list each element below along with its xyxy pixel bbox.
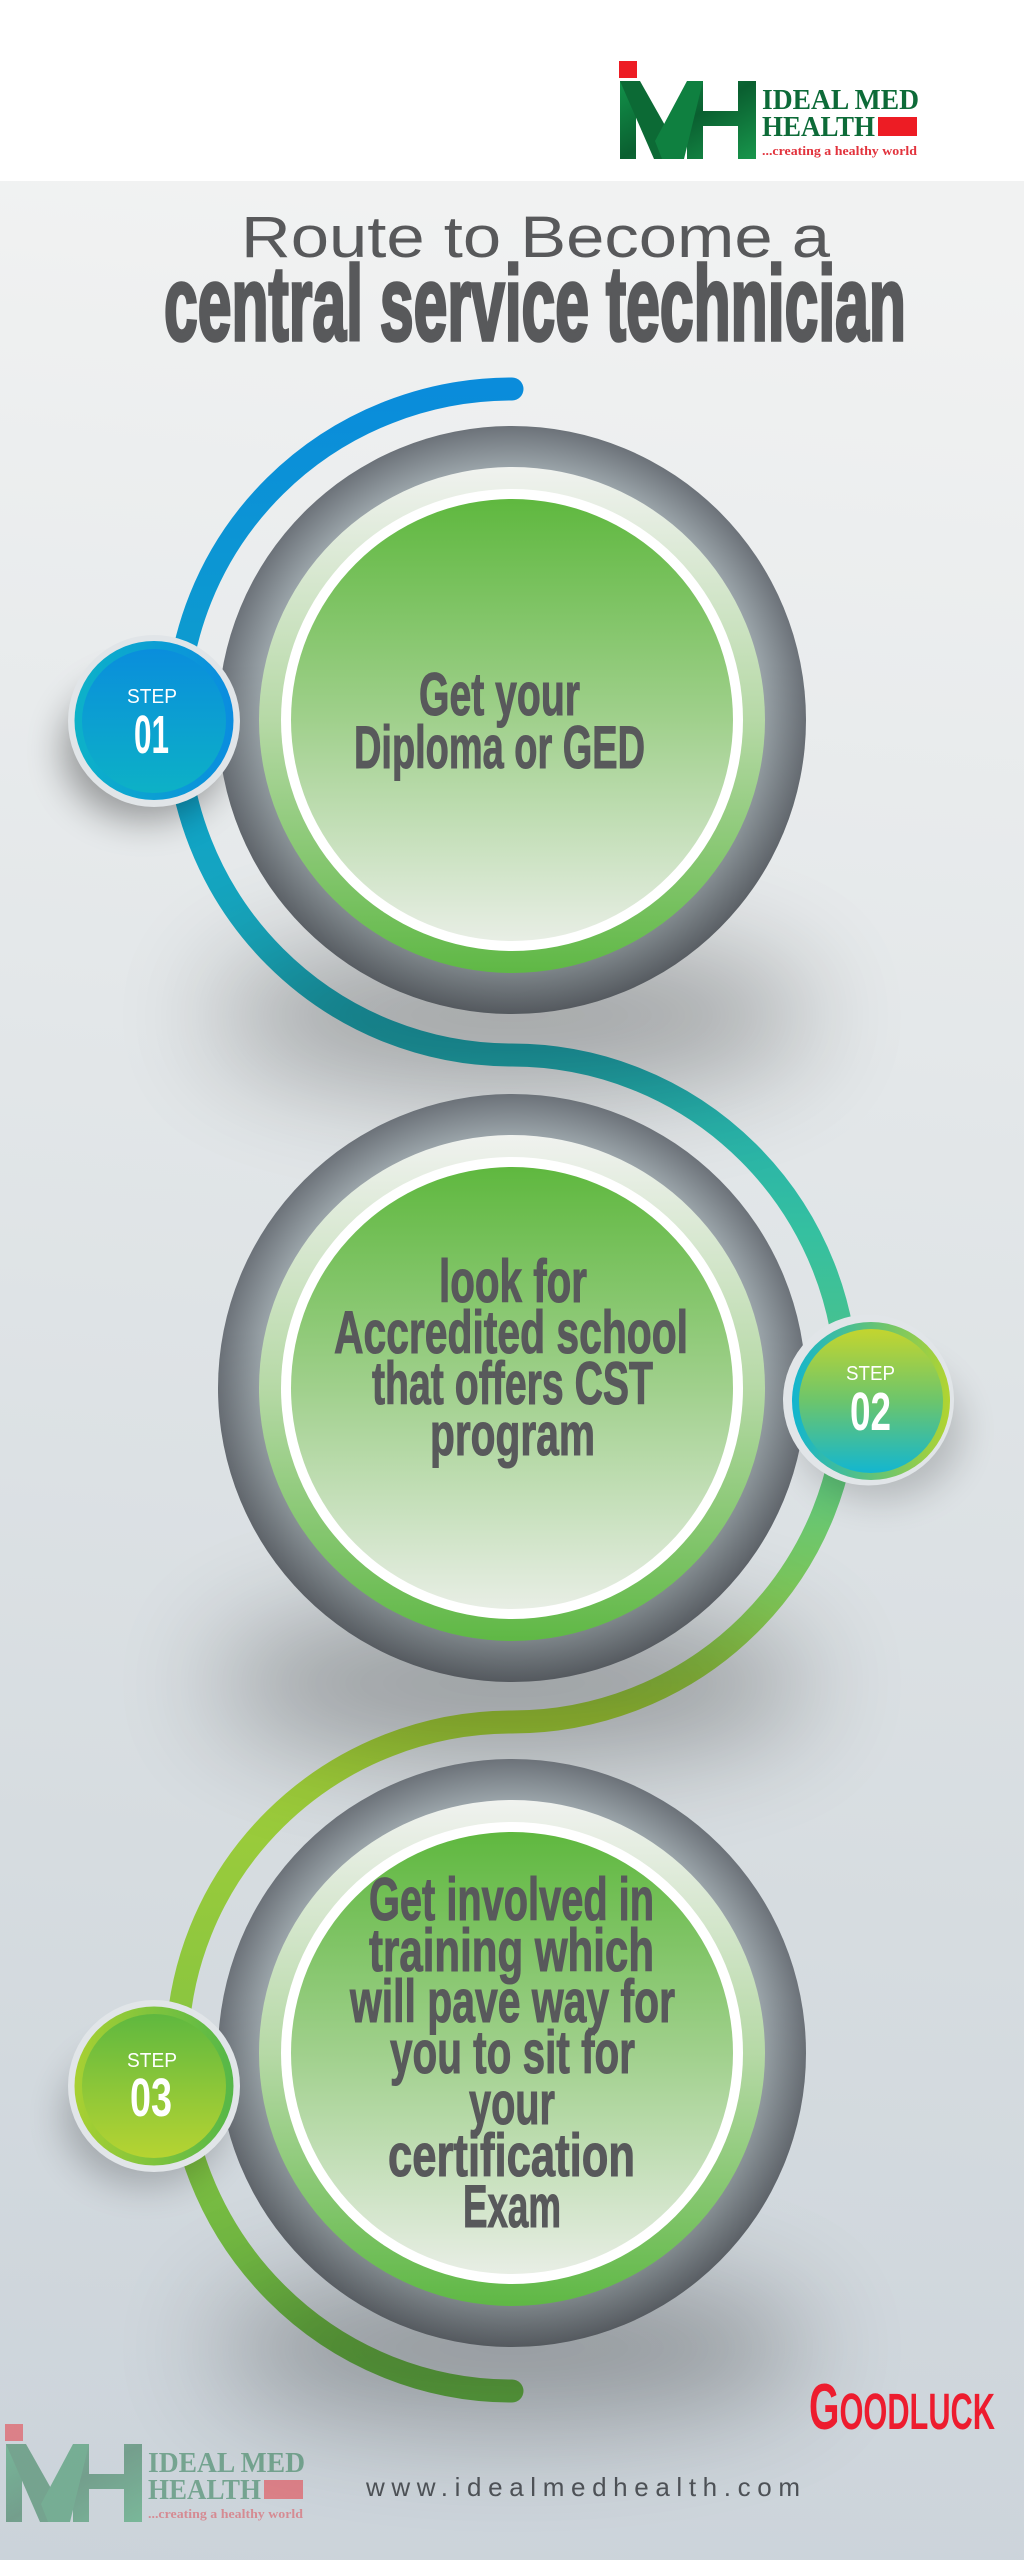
text: step 2: Accredited school — [334, 1299, 688, 1366]
connecting route arc — [177, 389, 847, 2391]
badge: step 02: STEP — [846, 1363, 895, 1385]
text: step 3: training which — [369, 1917, 654, 1984]
title: Route to Become a — [241, 205, 831, 270]
logo: faded footer: ...creating a healthy world — [148, 2506, 304, 2521]
badge: step 02 — [783, 1314, 954, 1486]
title — [164, 205, 906, 363]
badge: step 01: 01 — [134, 705, 169, 765]
text: step 3: your — [469, 2070, 555, 2137]
badge: step 01: STEP — [127, 686, 177, 708]
text: step 3: you to sit for — [390, 2019, 635, 2086]
text: step 2: program — [430, 1401, 595, 1468]
logo: Ideal Med Health header: IDEAL MED — [762, 84, 919, 116]
panel: step 1 circle — [218, 426, 806, 1014]
text: step 1 — [354, 661, 645, 781]
text: step 3: Get involved in — [369, 1866, 654, 1933]
badge: step 03 — [68, 2000, 240, 2172]
badge: step 03: STEP — [127, 2050, 177, 2072]
badge: step 01 — [68, 635, 240, 807]
logo: Ideal Med Health header: ...creating a healthy world — [762, 143, 918, 158]
shadows under circles — [63, 680, 962, 2423]
badge: step 03: 03 — [130, 2068, 172, 2128]
badge: step 02: 02 — [850, 1382, 891, 1442]
logo: faded footer: HEALTH — [148, 2474, 261, 2506]
text: step 3: certification — [388, 2122, 635, 2189]
logo: faded footer — [5, 2424, 305, 2522]
text: step 3: will pave way for — [349, 1968, 675, 2035]
website url: www.idealmedhealth.com — [365, 2472, 800, 2502]
text: step 1: Diploma or GED — [354, 714, 645, 781]
logo: Ideal Med Health header: HEALTH — [762, 111, 875, 143]
text: step 2 — [334, 1248, 688, 1468]
panel: step 3 circle — [218, 1759, 806, 2347]
text: step 2: that offers CST — [372, 1350, 653, 1417]
text: step 3: Exam — [463, 2173, 561, 2240]
text: step 1: Get your — [419, 661, 580, 728]
text: step 3 — [349, 1866, 675, 2240]
text: step 2: look for — [439, 1248, 587, 1315]
logo: Ideal Med Health header — [619, 61, 919, 159]
panel: step 2 circle — [218, 1094, 806, 1682]
logo: faded footer: IDEAL MED — [148, 2447, 305, 2479]
